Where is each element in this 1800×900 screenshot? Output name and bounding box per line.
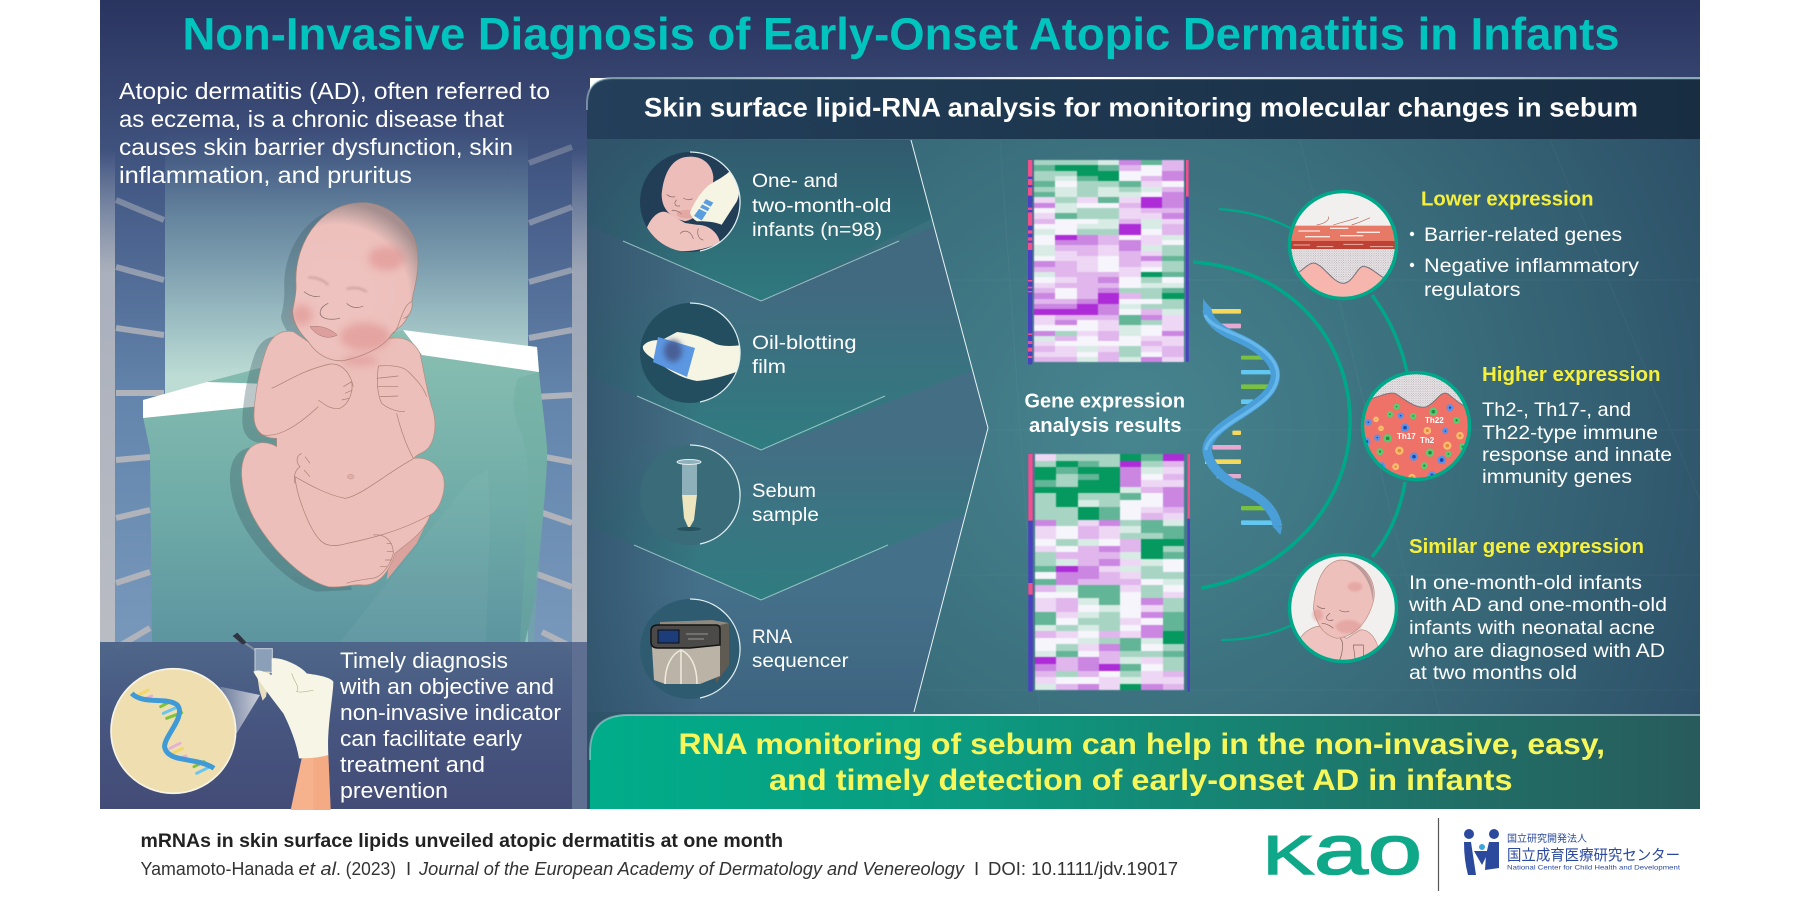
footer: citation xyxy=(140,858,1178,879)
logo: National Center for Child Health and Development: National Center for Child Health and Development xyxy=(1507,864,1680,872)
arrow: sampling flow chevrons xyxy=(587,140,1000,715)
footer: citation: I xyxy=(974,858,979,879)
callout: conclusion banner: RNA monitoring of sebum can help in the non-invasive, easy, xyxy=(678,728,1605,761)
icon: gloved hand holding sample tube xyxy=(233,633,333,810)
text block: higher expression: response and innate xyxy=(1482,444,1672,466)
footer: citation: . (2023) xyxy=(336,858,396,879)
text block: similar gene expression: infants with neonatal acne xyxy=(1409,617,1655,639)
text block: atopic dermatitis intro: causes skin barrier dysfunction, skin xyxy=(119,134,513,160)
text block: similar gene expression: with AD and one-month-old xyxy=(1408,594,1667,616)
footer: citation: et al xyxy=(298,858,337,879)
footer: citation: Yamamoto-Hanada xyxy=(140,858,295,879)
text block: higher expression: Higher expression xyxy=(1482,364,1660,386)
footer: citation: I xyxy=(406,858,411,879)
text block: lower expression xyxy=(1410,188,1639,301)
icon: sebum sample tube xyxy=(640,445,740,545)
logo: National Center for Child Health and Development xyxy=(1464,829,1680,875)
text: oil-blotting film: film xyxy=(752,356,786,378)
text block: timely diagnosis: treatment and xyxy=(340,752,485,777)
text: infants: two-month-old xyxy=(752,195,892,217)
icon: inflamed skin with immune cells xyxy=(1360,372,1473,480)
text block: similar gene expression: In one-month-old infants xyxy=(1409,572,1642,594)
text: oil-blotting film: Oil-blotting xyxy=(752,332,856,354)
heatmap annotation bars: bottom xyxy=(1028,454,1190,691)
illustration: blanket xyxy=(143,330,547,642)
text block: similar gene expression: at two months old xyxy=(1409,662,1577,684)
text block: atopic dermatitis intro: inflammation, and pruritus xyxy=(119,162,412,188)
text: gene expression analysis results xyxy=(1024,390,1185,437)
text block: similar gene expression xyxy=(1408,536,1667,684)
text: gene expression analysis results: Gene expression xyxy=(1024,390,1185,412)
logo: Kao: Kao xyxy=(1263,811,1422,889)
text block: atopic dermatitis intro: as eczema, is a chronic disease that xyxy=(119,106,505,132)
text: sebum sample: sample xyxy=(752,504,819,526)
connector: expression arcs xyxy=(1193,209,1407,640)
text: sebum sample: Sebum xyxy=(752,480,816,502)
callout: conclusion banner xyxy=(590,715,1700,809)
text: RNA sequencer xyxy=(752,626,849,672)
title: Non-Invasive Diagnosis of Early-Onset Atopic Dermatitis in Infants xyxy=(182,8,1620,60)
icon: oil-blotting film in hand xyxy=(640,303,742,403)
text block: lower expression: Negative inflammatory xyxy=(1424,255,1639,277)
text: infants xyxy=(752,170,892,241)
text: sebum sample xyxy=(752,480,819,526)
logo: National Center for Child Health and Development: 国立成育医療研究センター xyxy=(1507,847,1680,864)
logo: National Center for Child Health and Development: 国立研究開発法人 xyxy=(1507,832,1587,845)
icon: magnified RNA strand xyxy=(111,669,260,793)
heatmap annotation bars: top xyxy=(1028,160,1189,364)
text block: similar gene expression: Similar gene expression xyxy=(1409,536,1644,558)
text: infants: One- and xyxy=(752,170,838,192)
text block: similar gene expression: who are diagnosed with AD xyxy=(1408,640,1665,662)
text block: timely diagnosis: Timely diagnosis xyxy=(340,648,508,673)
text block: lower expression: regulators xyxy=(1424,279,1521,301)
text block: timely diagnosis xyxy=(339,648,562,803)
heatmap: gene expression top xyxy=(1033,159,1185,363)
text block: atopic dermatitis intro xyxy=(119,78,550,188)
text block: timely diagnosis: prevention xyxy=(340,778,448,803)
text block: higher expression: immunity genes xyxy=(1482,466,1632,488)
heatmap: gene expression bottom xyxy=(1034,453,1185,691)
callout: conclusion banner: and timely detection of early-onset AD in infants xyxy=(769,764,1512,797)
divider between logos xyxy=(1438,818,1440,891)
panel: timely diagnosis xyxy=(100,633,588,810)
icon: RNA sequencer xyxy=(640,599,740,699)
text block: higher expression: Th2-, Th17-, and xyxy=(1482,399,1631,421)
text block: timely diagnosis: with an objective and xyxy=(339,674,554,699)
text: RNA sequencer: sequencer xyxy=(752,650,849,672)
illustration: sleeping infant with atopic dermatitis xyxy=(230,203,444,592)
text: gene expression analysis results: analysis results xyxy=(1029,415,1182,437)
footer: citation: DOI: 10.1111/jdv.19017 xyxy=(988,858,1178,879)
icon: inflamed skin with immune cells: Th17 xyxy=(1397,432,1416,441)
icon: inflamed skin with immune cells: Th22 xyxy=(1425,416,1444,425)
panel: background left illustration xyxy=(100,0,1700,809)
footer: paper title: mRNAs in skin surface lipids unveiled atopic dermatitis at one month xyxy=(140,830,783,852)
heading: lipid-RNA analysis: Skin surface lipid-RNA analysis for monitoring molecular changes in sebum xyxy=(644,92,1638,122)
icon: infant face with neonatal acne xyxy=(1290,554,1396,665)
text: oil-blotting film xyxy=(752,332,856,378)
text block: higher expression xyxy=(1482,364,1672,488)
text block: timely diagnosis: can facilitate early xyxy=(340,726,523,751)
text block: lower expression: Barrier-related genes xyxy=(1424,224,1622,246)
text block: lower expression: Lower expression xyxy=(1421,188,1594,210)
panel: skin surface lipid-RNA analysis xyxy=(587,78,1700,809)
icon: skin barrier cross-section xyxy=(1287,192,1400,305)
text block: atopic dermatitis intro: Atopic dermatitis (AD), often referred to xyxy=(119,78,550,104)
icon: infant with oil-blotting film xyxy=(640,152,740,252)
footer: citation: Journal of the European Academy of Dermatology and Venereology xyxy=(418,858,966,879)
icon: inflamed skin with immune cells: Th2 xyxy=(1420,436,1435,445)
text block: higher expression: Th22-type immune xyxy=(1482,422,1658,444)
text: infants: infants (n=98) xyxy=(752,219,882,241)
text block: timely diagnosis: non-invasive indicator xyxy=(340,700,562,725)
text: RNA sequencer: RNA xyxy=(752,626,792,648)
icon: DNA helix xyxy=(1203,298,1282,535)
